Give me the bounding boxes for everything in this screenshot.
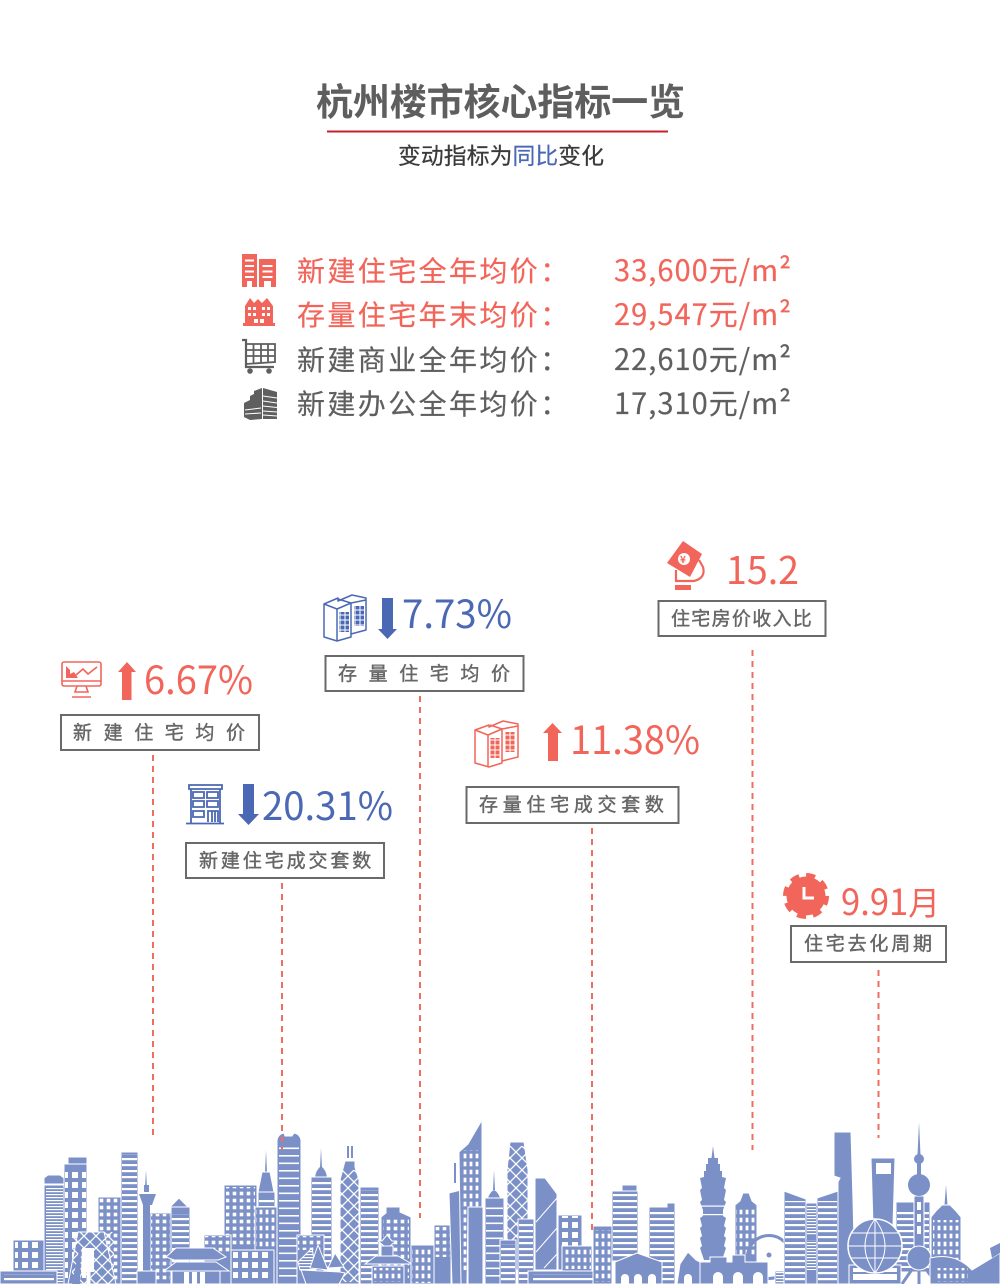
landmark: pavilion <box>164 1248 229 1284</box>
label box: 新建住宅均价 <box>73 718 257 745</box>
icon: gear clock <box>786 876 826 916</box>
icon: monitor with chart <box>62 662 101 697</box>
arrow up <box>543 723 562 761</box>
value: 11.38% <box>570 710 700 766</box>
indicator: destocking cycle <box>786 874 946 962</box>
subtitle: 变动指标为同比变化 <box>398 138 604 171</box>
label box <box>658 601 826 636</box>
label: 新建商业全年均价： <box>297 339 571 379</box>
landmark: wave building <box>930 1243 1000 1284</box>
label box: 住宅去化周期 <box>804 929 935 956</box>
label: 新建住宅全年均价： <box>297 250 571 290</box>
landmark: arched hall <box>615 1253 662 1284</box>
value: 17,310元/m² <box>614 381 791 423</box>
icon: shopping cart <box>242 340 275 374</box>
arrow up <box>118 662 136 700</box>
panel: price list <box>242 248 791 423</box>
landmark: globe <box>848 1219 902 1284</box>
landmark: bottle-opener tower <box>871 1158 895 1225</box>
icon: twin towers <box>475 721 518 767</box>
arrow down <box>378 598 397 639</box>
value: 15.2 <box>726 540 799 595</box>
skyline: left district <box>0 1152 190 1284</box>
landmark: observation tower <box>137 1170 156 1284</box>
skyline: centre-left district <box>164 1133 444 1284</box>
skyline: centre district <box>434 1120 603 1284</box>
label box: 新建住宅成交套数 <box>199 846 374 873</box>
landmark: tall curved tower <box>834 1132 855 1284</box>
row: commercial price <box>242 337 791 379</box>
indicator: resale residential transactions <box>466 710 700 823</box>
value: 22,610元/m² <box>614 337 791 379</box>
label box: 住宅房价收入比 <box>671 604 813 631</box>
label box: 存量住宅均价 <box>338 659 522 686</box>
landmark: Oriental Pearl Tower <box>902 1122 937 1284</box>
skyline: centre-right district <box>593 1146 800 1284</box>
value: 29,547元/m² <box>614 292 791 334</box>
icon: hand holding money: ¥ <box>680 551 686 566</box>
landmark: Taipei 101 <box>700 1146 726 1260</box>
label box: 存量住宅成交套数 <box>479 790 669 817</box>
landmark: CCTV headquarters <box>68 1232 116 1284</box>
title: 杭州楼市核心指标一览 <box>316 72 685 126</box>
label: 新建办公全年均价： <box>297 383 571 423</box>
label box <box>186 843 384 878</box>
label box <box>466 787 678 823</box>
title underline <box>327 130 668 132</box>
dashed leader lines <box>153 650 878 1230</box>
value: 9.91月 <box>841 874 940 926</box>
indicator: new residential transactions <box>186 776 393 878</box>
skyline illustration <box>0 1120 1000 1284</box>
value: 20.31% <box>262 776 393 832</box>
icon: residential towers <box>242 254 276 287</box>
row: new residential price <box>242 248 791 290</box>
value: 7.73% <box>402 584 512 640</box>
landmark: memorial gate <box>677 1252 768 1284</box>
icon: office block <box>186 785 224 824</box>
indicator: price to income ratio <box>658 540 826 636</box>
label box <box>791 926 946 962</box>
row: office price <box>244 381 791 423</box>
icon: hand holding money <box>667 541 704 590</box>
label: 存量住宅年末均价： <box>297 294 571 334</box>
icon: apartment block <box>243 298 275 326</box>
indicator: new residential average price <box>61 650 259 750</box>
indicator: resale residential average price <box>324 584 524 691</box>
landmark: junk boat <box>298 1245 345 1284</box>
value: 33,600元/m² <box>614 248 791 290</box>
arrow down <box>238 784 259 825</box>
icon: office building <box>244 388 277 420</box>
icon: twin towers <box>324 595 366 641</box>
landmark: ferris wheel <box>748 1236 790 1278</box>
skyline: right district <box>784 1122 1000 1284</box>
row: resale residential price <box>243 292 791 334</box>
value: 6.67% <box>144 650 253 706</box>
landmark: pagoda <box>365 1235 412 1284</box>
